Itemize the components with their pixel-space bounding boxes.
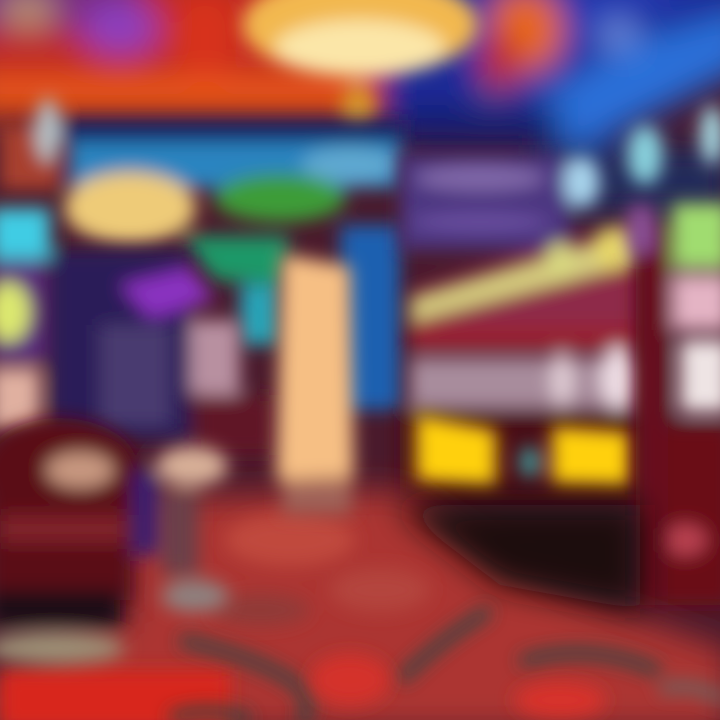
- right bank of machines: [400, 105, 720, 500]
- floor: [0, 490, 720, 720]
- central peach pillar: [276, 254, 354, 514]
- chandelier: [242, 0, 478, 132]
- back wall band: [0, 98, 405, 410]
- right edge machines and pillar: [628, 203, 720, 605]
- left seating: [0, 418, 229, 664]
- yellow screens: [416, 414, 630, 486]
- left slot machines: [0, 208, 275, 455]
- ceiling: [0, 0, 720, 215]
